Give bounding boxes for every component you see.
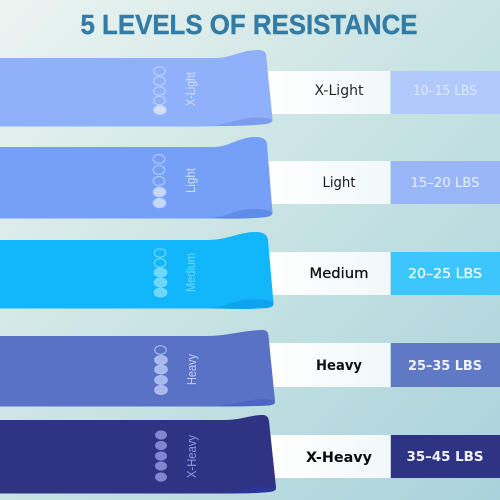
weight range: 15–20 LBS [410,175,480,191]
band label: Medium [183,253,198,292]
row: X-Heavy [262,435,500,478]
resistance dots: two of five [153,154,166,208]
band: Light [0,137,272,219]
band: Medium [0,232,274,309]
weight range: 20–25 LBS [408,266,482,282]
row: X-Light [262,71,500,114]
level name: Medium [310,266,368,282]
weight range: 10–15 LBS [413,83,477,99]
band label: X-Light [183,72,198,106]
resistance dots: five of five [155,430,167,482]
row: Light [262,161,500,204]
resistance dots: three of five [154,249,167,297]
row: Medium [262,252,500,295]
band: X-Heavy [0,415,276,494]
band label: X-Heavy [184,435,199,478]
resistance dots: four of five [155,346,167,394]
band label: Light [183,168,198,193]
weight range: 25–35 LBS [408,359,482,374]
band label: Heavy [184,354,199,385]
weight range: 35–45 LBS [406,449,484,465]
level name: Light [322,175,356,191]
level name: X-Light [314,83,364,99]
level name: Heavy [316,358,362,374]
band: Heavy [0,330,275,406]
band: X-Light [0,50,272,126]
resistance dots: one of five [154,67,166,114]
title: 5 LEVELS OF RESISTANCE [80,9,418,40]
row: Heavy [262,343,500,387]
level name: X-Heavy [306,450,373,466]
